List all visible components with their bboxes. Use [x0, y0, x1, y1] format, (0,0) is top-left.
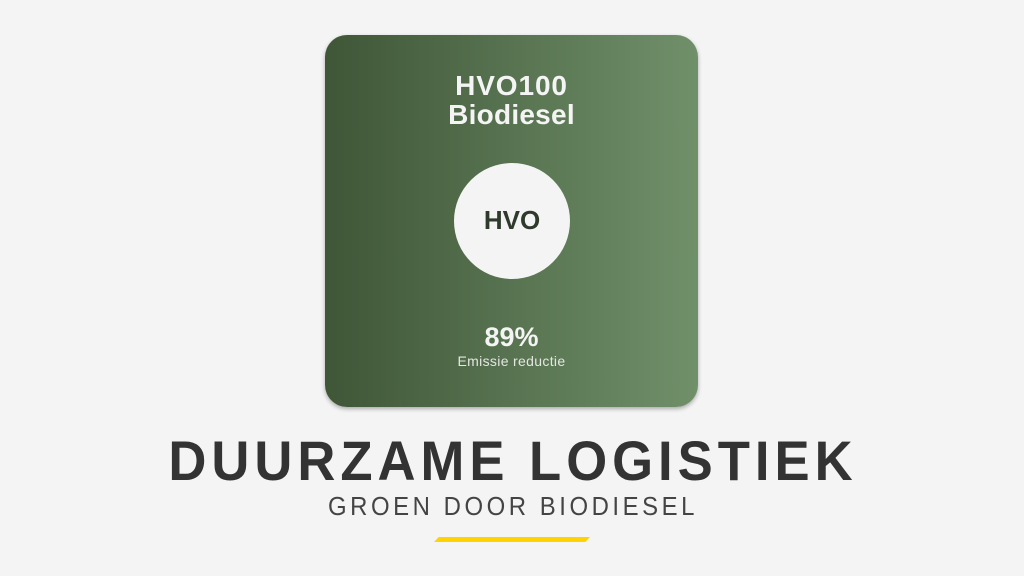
panel: HVO100 card: [325, 35, 698, 407]
accent bar: [434, 537, 590, 542]
subtitle: GROEN DOOR BIODIESEL: [328, 491, 698, 521]
card heading: HVO100: [455, 70, 568, 101]
card heading: [448, 70, 575, 130]
stat value: 89%: [484, 322, 539, 352]
card heading: Biodiesel: [448, 99, 575, 130]
stat: emission reduction: [458, 322, 565, 369]
title: DUURZAME LOGISTIEK: [168, 429, 858, 492]
icon: HVO circle: [454, 163, 570, 279]
icon: HVO circle: HVO: [484, 205, 540, 235]
stat label: Emissie reductie: [458, 353, 565, 369]
